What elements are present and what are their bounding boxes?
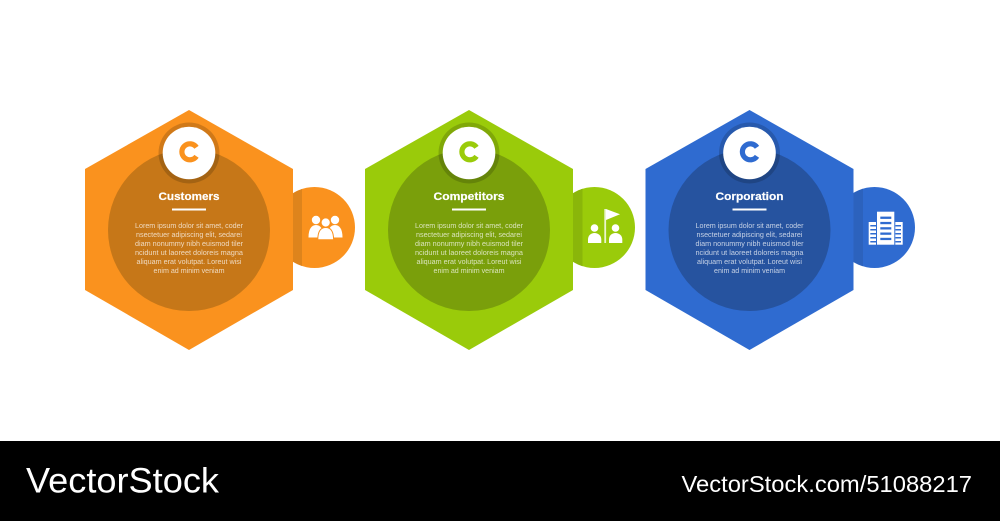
- body text: enim ad minim veniam: [434, 266, 504, 275]
- footer image id: VectorStock.com/51088217: [682, 471, 972, 497]
- inner circle: [388, 149, 550, 311]
- badge letter: [462, 144, 476, 160]
- divider: [172, 208, 206, 210]
- badge: [723, 127, 776, 179]
- badge letter: [182, 144, 196, 160]
- body text: Lorem ipsum dolor sit amet, coder: [696, 221, 804, 230]
- panel: customers: [85, 110, 355, 350]
- icon: people and flag: [588, 209, 622, 243]
- side circle: [274, 187, 355, 268]
- body text: Lorem ipsum dolor sit amet, coder: [135, 221, 243, 230]
- body text: ncidunt ut laoreet doloreis magna: [415, 248, 524, 257]
- footer logo: VectorStock: [26, 462, 220, 500]
- divider: [452, 208, 486, 210]
- divider: [732, 208, 766, 210]
- badge ring: [158, 122, 220, 184]
- body text: diam nonummy nibh euismod tiler: [135, 239, 243, 248]
- hexagon: [85, 110, 293, 350]
- side circle shade: [853, 189, 863, 266]
- body text: ncidunt ut laoreet doloreis magna: [135, 248, 244, 257]
- side circle: [554, 187, 635, 268]
- body text: Lorem ipsum dolor sit amet, coder: [415, 221, 523, 230]
- body text: enim ad minim veniam: [154, 266, 224, 275]
- body text: aliquam erat volutpat. Loreut wisi: [136, 257, 242, 266]
- badge ring: [438, 122, 500, 184]
- side circle: [834, 187, 915, 268]
- heading: Customers: [158, 191, 220, 203]
- body text: diam nonummy nibh euismod tiler: [696, 239, 804, 248]
- hexagon: [646, 110, 854, 350]
- icon: buildings: [869, 212, 903, 245]
- panel: corporation: [646, 110, 915, 350]
- badge: [163, 127, 215, 179]
- hexagon: [365, 110, 573, 350]
- side circle shade: [573, 189, 582, 266]
- body text: ncidunt ut laoreet doloreis magna: [696, 248, 804, 257]
- icon: people: [308, 216, 342, 240]
- body text: nsectetuer adipiscing elit, sedarei: [696, 230, 803, 239]
- inner circle: [108, 149, 270, 311]
- body text: [415, 221, 524, 275]
- body text: nsectetuer adipiscing elit, sedarei: [416, 230, 522, 239]
- panel: competitors: [365, 110, 635, 350]
- body text: [696, 221, 804, 275]
- body text: aliquam erat volutpat. Loreut wisi: [416, 257, 522, 266]
- badge: [443, 127, 495, 179]
- side circle shade: [293, 189, 302, 266]
- heading: Corporation: [716, 191, 784, 203]
- body text: nsectetuer adipiscing elit, sedarei: [136, 230, 242, 239]
- inner circle: [668, 149, 830, 311]
- badge ring: [719, 122, 780, 184]
- body text: aliquam erat volutpat. Loreut wisi: [697, 257, 802, 266]
- heading: Competitors: [434, 191, 504, 203]
- footer bar: [0, 441, 1000, 521]
- body text: enim ad minim veniam: [714, 266, 785, 275]
- body text: diam nonummy nibh euismod tiler: [415, 239, 523, 248]
- body text: [135, 221, 244, 275]
- badge letter: [742, 144, 757, 160]
